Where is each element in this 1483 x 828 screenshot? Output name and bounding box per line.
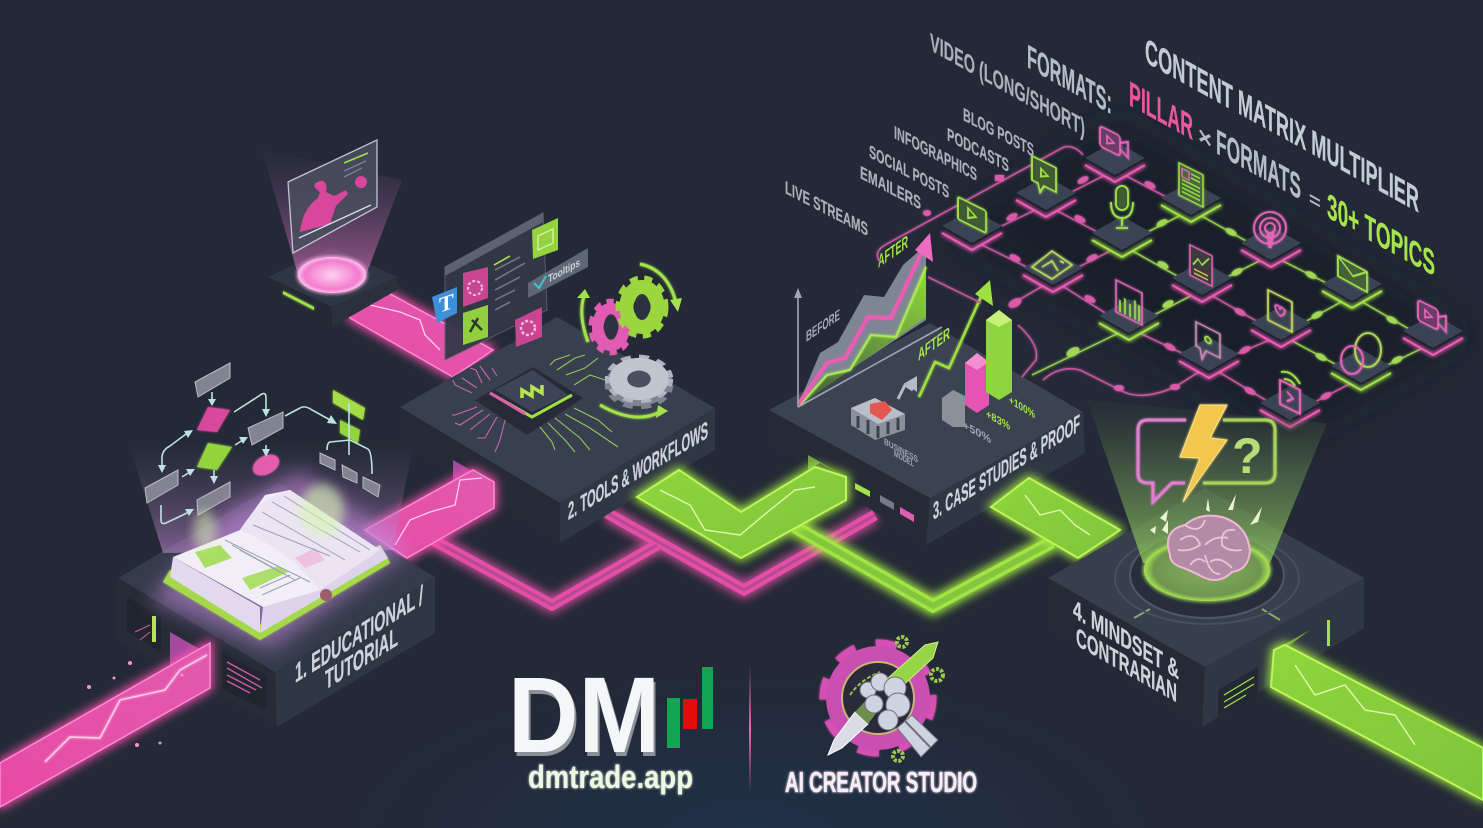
pipe: green from case studies to mindset xyxy=(991,478,1120,558)
chip and circuit traces xyxy=(452,355,618,452)
business model icon xyxy=(851,376,918,470)
small gears xyxy=(893,637,943,761)
format list: PODCASTS xyxy=(947,125,1009,177)
route: thin pink lines xyxy=(433,513,875,605)
logo candles xyxy=(667,667,713,748)
icon: T tile: T xyxy=(439,288,454,318)
speech bubble: green xyxy=(1203,420,1275,483)
logo url: dmtrade.app xyxy=(528,759,693,795)
node: microphone xyxy=(1092,186,1152,257)
node: report xyxy=(1172,245,1232,302)
format list: LIVE STREAMS xyxy=(785,178,868,241)
front panel: code xyxy=(127,597,161,652)
gears xyxy=(577,264,682,418)
format list: SOCIAL POSTS xyxy=(869,142,949,203)
value labels xyxy=(963,393,1035,446)
business model icon: BUSINESS xyxy=(884,437,918,466)
label: educational tutorial xyxy=(295,580,423,696)
format list: INFOGRAPHICS xyxy=(894,123,977,186)
node: document xyxy=(1161,163,1221,222)
tool window xyxy=(432,213,588,360)
node: heart card xyxy=(1251,290,1311,347)
text: 3. CASE STUDIES & PROOF xyxy=(933,408,1080,526)
chart label before: BEFORE xyxy=(806,305,840,346)
logo: AI creator studio icon xyxy=(824,637,943,761)
flowchart xyxy=(145,363,380,524)
pipe: green from tools to case studies xyxy=(637,467,846,558)
matrix connections xyxy=(877,147,1433,415)
logo: DM trade: DM xyxy=(508,654,660,775)
node: post xyxy=(1016,156,1076,217)
format list: VIDEO (LONG/SHORT) xyxy=(930,28,1085,142)
business model icon: MODEL xyxy=(894,449,914,470)
heading: content matrix multiplier: = xyxy=(1309,186,1321,215)
value labels: +100% xyxy=(1009,393,1035,422)
format list: BLOG POSTS xyxy=(963,105,1034,162)
node: play xyxy=(942,197,1002,250)
node: live xyxy=(1260,372,1320,427)
node: image xyxy=(1023,251,1083,292)
icon: T tile xyxy=(432,287,457,323)
matrix nodes xyxy=(942,126,1463,427)
question mark: ? xyxy=(1232,428,1263,484)
brain xyxy=(1168,516,1250,580)
label: AI creator studio: AI CREATOR STUDIO xyxy=(785,767,977,799)
line chart: before and after xyxy=(794,232,942,407)
platform 4: mindset xyxy=(1048,488,1364,727)
green gear xyxy=(619,279,665,335)
label: mindset and contrarian: 4. MINDSET & xyxy=(1073,593,1179,685)
label: mindset and contrarian xyxy=(1073,593,1179,708)
value labels: +50% xyxy=(963,418,991,446)
label: educational tutorial: TUTORIAL xyxy=(325,621,398,696)
lightning bolt xyxy=(1180,405,1227,502)
video screen xyxy=(288,140,377,253)
pipe: pink from tutorial to tools xyxy=(365,470,494,558)
hologram: brain and speech bubbles xyxy=(1087,400,1327,624)
pink gear xyxy=(592,302,630,352)
value labels: +83% xyxy=(986,407,1010,433)
tooltip: Tooltips xyxy=(548,255,580,286)
heading: content matrix multiplier: PILLAR xyxy=(1129,73,1193,148)
pipe: pink from video stage to tools xyxy=(350,290,493,377)
tooltip xyxy=(528,248,588,298)
heading: content matrix multiplier xyxy=(1027,30,1435,284)
robot fist xyxy=(860,673,938,757)
pipe: green output xyxy=(1271,645,1483,800)
node: podcast xyxy=(1241,212,1301,267)
heading: content matrix multiplier: FORMATS: xyxy=(1027,37,1112,122)
text: 2. TOOLS & WORKFLOWS xyxy=(568,415,708,526)
second after label: AFTER xyxy=(918,324,950,365)
grey gear xyxy=(608,357,670,407)
node: chat xyxy=(1331,333,1391,390)
bar chart: results xyxy=(918,280,1035,446)
node: bar chart xyxy=(1099,280,1159,340)
logo: DM trade: DM xyxy=(510,658,662,779)
speech bubble: pink xyxy=(1138,420,1186,502)
face panel: notes xyxy=(1218,667,1258,716)
platform 2: tools xyxy=(400,317,715,543)
platform: video stage xyxy=(268,247,397,327)
hologram: video lesson xyxy=(262,140,402,293)
hologram cone: flowchart xyxy=(130,440,414,553)
front panel: pink lines xyxy=(223,653,267,710)
pipe: main input pink xyxy=(0,643,210,807)
platform 1: educational xyxy=(118,483,435,727)
node: pull xyxy=(1179,322,1239,378)
node: video 2 xyxy=(1403,300,1463,355)
heading: content matrix multiplier: × xyxy=(1198,121,1212,155)
pen xyxy=(828,642,938,755)
chart label after: AFTER xyxy=(878,232,908,272)
heading: content matrix multiplier: FORMATS xyxy=(1216,121,1301,207)
divider xyxy=(749,665,751,793)
open book xyxy=(150,470,410,650)
format list xyxy=(785,28,1085,241)
format list: EMAILERS xyxy=(860,163,921,214)
label: educational tutorial: 1. EDUCATIONAL / xyxy=(295,580,423,689)
node: video xyxy=(1085,126,1145,182)
label: mindset and contrarian: CONTRARIAN xyxy=(1076,622,1177,708)
connection beads xyxy=(923,175,1404,401)
route: thin green line xyxy=(795,527,1052,606)
node: email xyxy=(1322,256,1382,308)
platform 3: case studies xyxy=(769,323,1085,545)
